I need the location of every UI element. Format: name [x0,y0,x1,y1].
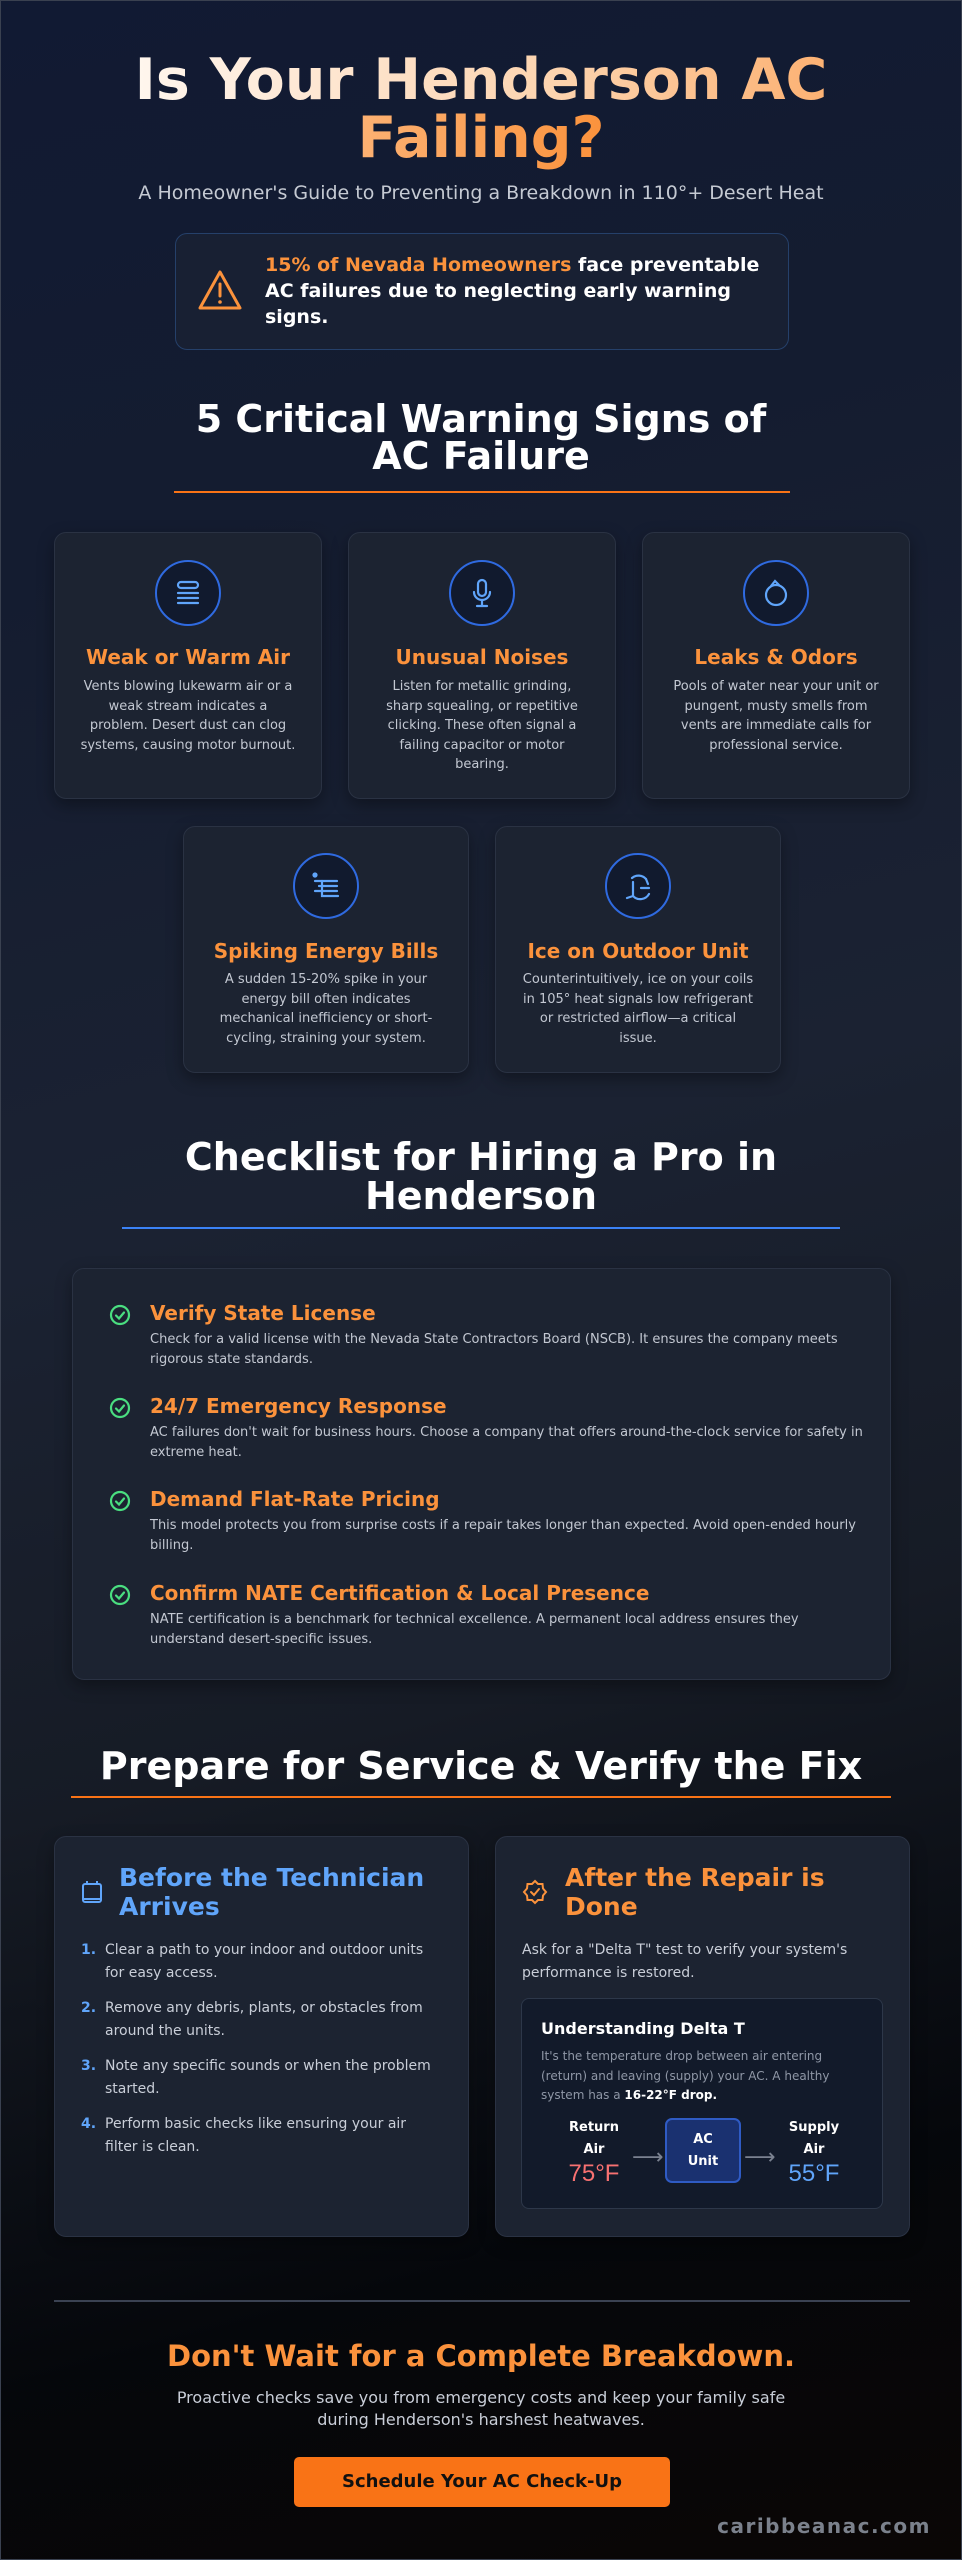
diagram [569,2118,839,2187]
panel: checklist: Demand Flat-Rate Pricing [150,1487,440,1511]
heading: Done [565,1892,638,1921]
item: NATE [110,1581,799,1647]
card: energy bills [183,826,469,1073]
panel: checklist: Check for a valid license with the Nevada State Contractors Board (NSCB). It ensures the company meets rigorous state standards. [150,1332,838,1367]
list: Remove any debris, plants, or obstacles from around the units. [105,2000,423,2039]
heading [565,1863,825,1921]
list: Clear a path to your indoor and outdoor units for easy access. [105,1942,423,1981]
card: energy bills: Spiking Energy Bills [214,939,438,963]
diagram: Air [584,2142,604,2157]
card: weak air: Vents blowing lukewarm air or a weak stream indicates a problem. Desert dust can clog systems, causing motor burnout. [81,679,295,752]
heading: checklist: Henderson [365,1174,597,1218]
card: noises: Listen for metallic grinding, sharp squealing, or repetitive clicking. These often signal a failing capacitor or motor bearing. [386,679,578,772]
card: leaks [642,532,910,799]
item: emergency [110,1394,863,1460]
list: 3. [81,2058,96,2074]
heading: Before the Technician [119,1863,424,1892]
item: pricing [110,1487,856,1553]
card: ice: Counterintuitively, ice on your coils in 105° heat signals low refrigerant or restricted airflow—a critical issue. [523,972,753,1046]
list [81,1942,431,2155]
card: weak air [54,532,322,799]
icon: microphone [449,560,515,626]
delta T box: It's the temperature drop between air entering (return) and leaving (supply) your AC. A healthy system has a 16-22°F drop. [541,2049,829,2102]
icon: calendar [82,1881,102,1903]
card: weak air: Weak or Warm Air [86,645,290,669]
card: energy bills: A sudden 15-20% spike in your energy bill often indicates mechanical inefficiency or short-cycling, straining your system. [220,972,432,1046]
heading: warning signs [196,397,767,478]
diagram: 55°F [789,2160,839,2187]
card: ice [495,826,781,1073]
panel: checklist [72,1268,891,1680]
panel: checklist: This model protects you from surprise costs if a repair takes longer than expected. Avoid open-ended hourly billing. [150,1518,856,1553]
heading: checklist: Checklist for Hiring a Pro in [185,1135,777,1179]
stat callout [175,233,789,350]
item: license [110,1301,838,1367]
title: Failing? [357,105,605,171]
icon: drop [743,560,809,626]
diagram: ⟶ [632,2145,664,2170]
panel: before [54,1836,469,2237]
title: Is Your Henderson AC [135,47,827,113]
panel: checklist: Confirm NATE Certification & Local Presence [150,1581,649,1605]
diagram: ⟶ [744,2145,776,2170]
panel: checklist: 24/7 Emergency Response [150,1394,447,1418]
card: ice: Ice on Outdoor Unit [527,939,749,963]
icon: badge check [522,1880,548,1904]
heading: warning signs: 5 Critical Warning Signs of [196,397,766,441]
diagram: AC [693,2132,713,2147]
icon: vent [155,560,221,626]
heading [119,1863,424,1921]
heading: Arrives [119,1892,220,1921]
panel: checklist: Verify State License [150,1301,376,1325]
list: Perform basic checks like ensuring your air filter is clean. [105,2116,406,2155]
card: leaks: Leaks & Odors [694,645,858,669]
diagram: 75°F [569,2160,619,2187]
icon: bill [293,853,359,919]
list: Note any specific sounds or when the problem started. [105,2058,431,2097]
card: leaks: Pools of water near your unit or pungent, musty smells from vents are immediate calls for professional service. [673,679,879,752]
panel: checklist: NATE certification is a benchmark for technical excellence. A permanent local address ensures they understand desert-specific issues. [150,1612,799,1647]
brand: caribbeanac.com [717,2514,931,2538]
CTA heading: Don't Wait for a Complete Breakdown. [167,2339,795,2373]
diagram: Supply [789,2120,839,2135]
subtitle: A Homeowner's Guide to Preventing a Breakdown in 110°+ Desert Heat [138,182,824,204]
delta T box: Understanding Delta T [541,2019,745,2038]
diagram: Unit [688,2154,718,2169]
list: 2. [81,2000,96,2016]
delta T box [521,1998,883,2209]
stat text: 15% of Nevada Homeowners face preventable AC failures due to neglecting early warning signs. [265,254,759,328]
card: noises: Unusual Noises [396,645,568,669]
intro text: Ask for a "Delta T" test to verify your system's performance is restored. [522,1942,847,1981]
CTA button: Schedule Your AC Check-Up [342,2471,622,2492]
card: noises [348,532,616,799]
panel: after [495,1836,910,2237]
CTA button [294,2457,670,2507]
CTA text: Proactive checks save you from emergency costs and keep your family safe during Henderson's harshest heatwaves. [177,2388,785,2429]
heading: checklist [185,1135,777,1218]
list: 4. [81,2116,96,2132]
list: 1. [81,1942,96,1958]
title [135,47,827,171]
panel: checklist: AC failures don't wait for business hours. Choose a company that offers around-the-clock service for safety in extreme heat. [150,1425,863,1460]
icon: ice [605,853,671,919]
diagram: Air [804,2142,824,2157]
heading: warning signs: AC Failure [372,434,590,478]
heading: After the Repair is [565,1863,825,1892]
heading: prepare: Prepare for Service & Verify the Fix [100,1744,862,1788]
diagram: Return [569,2120,619,2135]
icon: warning [198,270,242,310]
